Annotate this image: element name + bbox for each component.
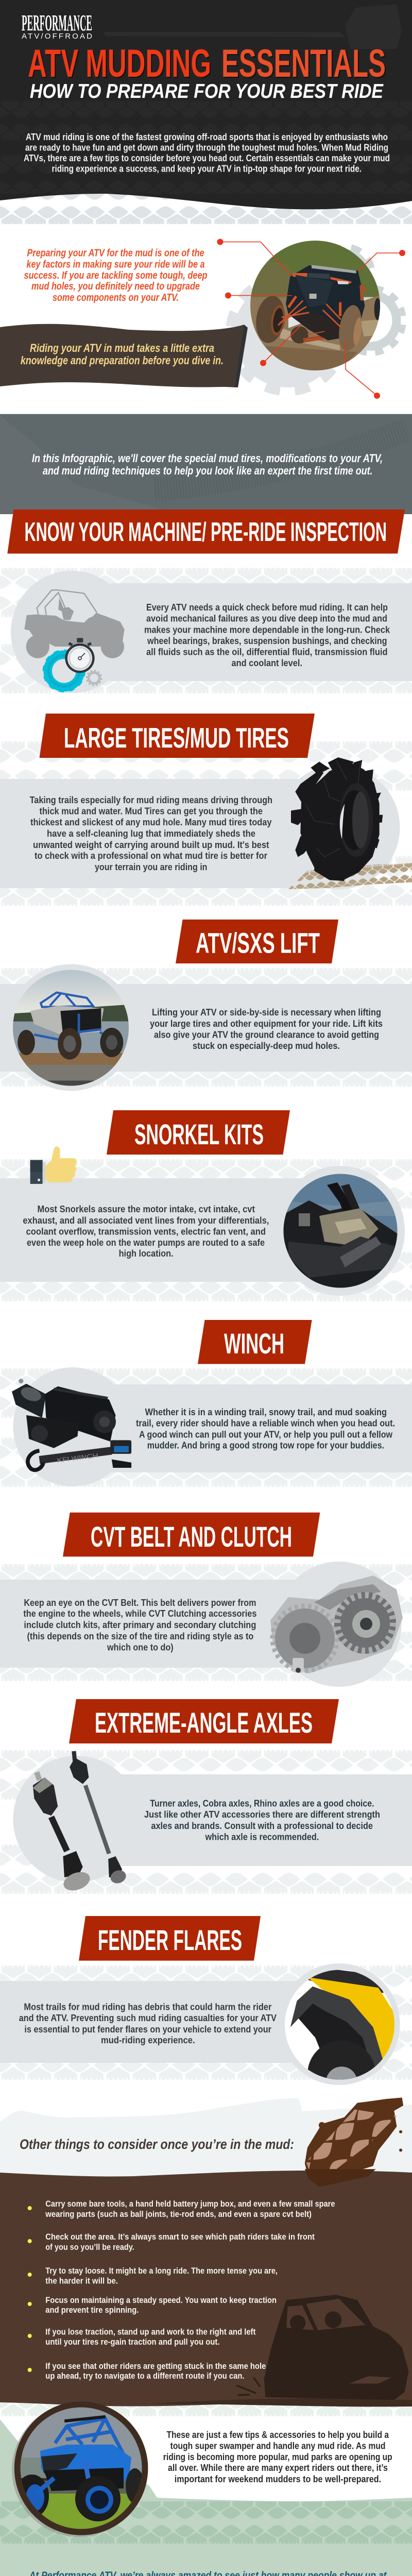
text block: Taking trails especially for mud riding means driving through [30,795,272,805]
text block [19,2002,277,2045]
heading [176,920,338,963]
text block: Most Snorkels assure the motor intake, cvt intake, cvt [37,1204,255,1214]
text block: high location. [119,1248,174,1259]
heading: LARGE TIRES/MUD TIRES [64,722,289,754]
text block: Keep an eye on the CVT Belt. This belt delivers power from [24,1598,256,1608]
photo: ATV in mud [247,239,385,371]
text block: Most trails for mud riding has debris that could harm the rider [24,2002,271,2012]
list of tips: Focus on maintaining a steady speed. You want to keep traction [45,2296,277,2305]
list of tips: If you lose traction, stand up and work to the right and left [45,2328,256,2337]
text block: Every ATV needs a quick check before mud riding. It can help [146,602,388,613]
text block: important for weekend mudders to be well-prepared. [175,2473,381,2484]
callout text: success. If you are tackling some tough, deep [24,270,207,281]
heading [107,1110,290,1155]
text block: axles and brands. Consult with a professional to decide [151,1821,373,1831]
list of tips [28,2199,335,2381]
icon: winch: KFI WINCH [57,1452,99,1464]
list of tips: Check out the area. It’s always smart to see which path riders take in front [45,2232,315,2242]
heading: WINCH [224,1327,284,1360]
text block: and the ATV. Preventing such mud riding casualties for your ATV [19,2013,277,2023]
photo: lifted side-by-side [10,968,131,1089]
section: snorkel kits [0,1110,412,1302]
text block: which axle is recommended. [205,1832,319,1842]
panel: header: PERFORMANCE [22,10,92,36]
icon: thumbs up [30,1146,76,1184]
text block [136,1407,395,1451]
text block [144,1799,380,1842]
list of tips: up ahead, try to navigate to a different route if you can. [45,2371,245,2381]
list of tips: the harder it will be. [45,2277,118,2286]
heading [7,510,405,553]
icon: winch [12,1379,131,1470]
text block: mudder. And bring a good strong tow rope for your buddies. [147,1440,384,1451]
icon: ATV with stopwatch and gears [24,590,125,690]
icon: mud tire with track [288,757,412,889]
panel: infographic intro band [0,414,412,514]
photo: fender flare [290,1970,394,2079]
text block: include clutch kits, after primary and secondary clutching [24,1620,256,1630]
intro text [24,132,390,174]
text block [30,795,272,872]
text block: exhaust, and all associated vent lines from your differentials, [23,1215,269,1226]
intro text: riding experience a success, and keep your ATV in tip-top shape for your next ride. [52,164,362,174]
icon: background gears [230,247,403,392]
heading [63,1513,320,1556]
text block [23,1204,269,1259]
text block: Whether it is in a winding trail, snowy trail, and mud soaking [145,1407,387,1417]
section: extreme-angle axles [0,1699,412,1894]
text block: stuck on especially-deep mud holes. [193,1041,340,1051]
list of tips: Carry some bare tools, a hand held battery jump box, and even a few small spare [45,2199,335,2209]
text block: thickest and slickest of any mud hole. Many mud tires today [30,817,272,827]
callout lines and dots [217,239,405,399]
text block [150,1007,383,1051]
photo: snorkel on Can-Am [283,1174,398,1288]
heading [198,1320,312,1364]
heading: FENDER FLARES [98,1924,242,1956]
text block: mud-riding experience. [101,2035,195,2045]
list of tips: of you so you’ll be ready. [45,2243,134,2252]
list of tips: If you see that other riders are getting stuck in the same hole [45,2362,266,2371]
callout text [24,247,207,303]
logo: ATV/OFFROAD [22,32,92,41]
mud band [0,2171,412,2406]
text block: your large tires and other equipment for your ride. Lift kits [150,1019,383,1029]
section: closing [0,2401,412,2576]
section: know your machine [0,510,412,694]
heading: Other things to consider once you’re in the mud: [20,2137,294,2152]
text block: your terrain you are riding in [95,862,207,872]
heading [69,1699,339,1743]
text block: makes your machine more dependable in the long-run. Check [144,625,390,635]
callout banner: Riding your ATV in mud takes a little extra [30,342,214,354]
callout banner: knowledge and preparation before you dive in. [21,354,224,367]
silhouette: UTV in mud [150,2295,412,2406]
callout text: key factors in making sure your ride will be a [27,259,205,270]
text block: unwanted weight of carrying around built up mud. It's best [33,840,269,850]
section: CVT belt and clutch [0,1513,412,1687]
text block: also give your ATV the ground clearance to avoid getting [154,1029,379,1040]
text block: and coolant level. [232,658,302,668]
text block: is essential to put fender flares on your vehicle to extend your [24,2024,271,2035]
text block [144,602,390,668]
section: fender flares [0,1916,412,2085]
text block: all fluids such as the oil, differential fluid, transmission fluid [146,647,387,657]
text block: Turner axles, Cobra axles, Rhino axles are a good choice. [150,1799,374,1809]
heading: ATV/SXS LIFT [196,926,320,959]
list of tips: until your tires re-gain traction and pull you out. [45,2337,220,2347]
text block: (this depends on the size of the tire and riding style as to [27,1631,253,1641]
text block: avoid mechanical failures as you dive deep into the mud and [146,614,387,624]
callout text: Preparing your ATV for the mud is one of the [27,247,204,259]
callout text: some components on your ATV. [53,292,179,303]
text block [163,2429,392,2484]
text block: Just like other ATV accessories there are different strength [144,1809,380,1820]
logo [22,10,92,41]
section: other things to consider [0,2097,412,2417]
icon: axle shafts [33,1751,128,1894]
callout text: mud holes, you definitely need to upgrade [31,281,200,292]
section: ATV/SXS lift [0,920,412,1091]
text block: even the weep hole on the water pumps are routed to a safe [27,1238,265,1248]
section: large tires [0,714,412,906]
callout banner [0,324,248,387]
heading: SNORKEL KITS [134,1118,264,1150]
text block: Lifting your ATV or side-by-side is necessary when lifting [152,1007,381,1018]
panel: header [0,0,412,224]
list of tips: Try to stay loose. It might be a long ride. The more tense you are, [45,2266,278,2276]
panel: preparation callouts [0,239,405,399]
heading [39,714,315,758]
photo: blue lifted UTV [12,2401,148,2537]
list of tips: and prevent tire spinning. [45,2306,139,2315]
text block: to check with a professional on what mud tire is better for [35,851,267,861]
text block [23,1598,256,1653]
text block: coolant overflow, transmission vents, electric fan vent, and [26,1226,266,1236]
text block: the engine to the wheels, while CVT Clutching accessories [23,1608,256,1619]
icon: CVT clutch assembly [270,1575,403,1673]
heading [79,1916,261,1961]
title: ATV MUDDING [28,42,211,86]
text block: thick mud and water. Mud Tires can get you through the [39,806,263,817]
icon: mud splatter [305,2097,403,2187]
text block: wheel bearings, brakes, suspension bushings, and checking [147,636,387,646]
text block: which one to do) [107,1642,174,1653]
section: winch [0,1320,412,1487]
text block: have a self-cleaning lug that immediately sheds the [47,828,255,839]
list of tips: wearing parts (such as ball joints, tie-rod ends, and even a spare cvt belt) [45,2210,312,2219]
